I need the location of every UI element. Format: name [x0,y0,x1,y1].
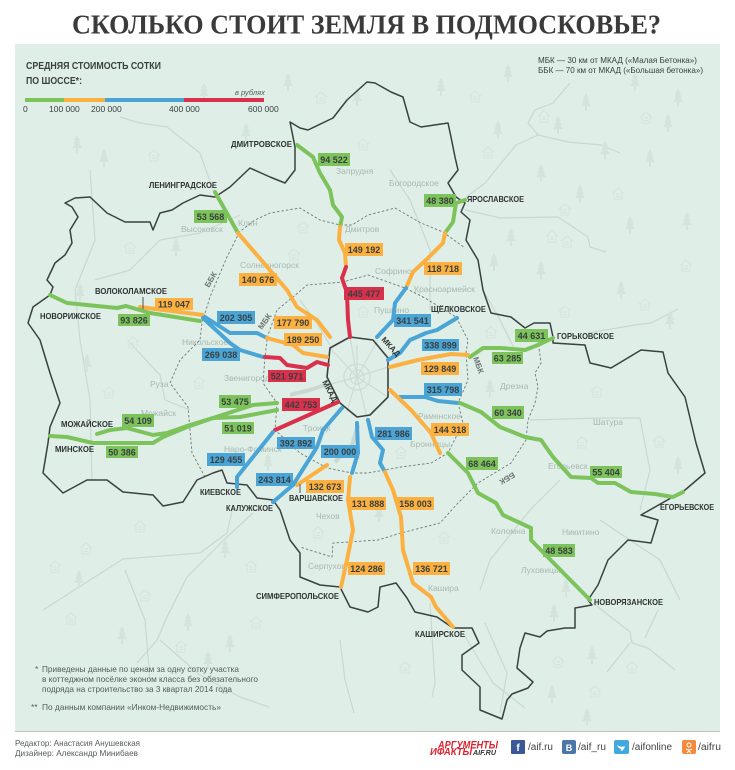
legend: 600 000 [248,104,279,114]
legend: ПО ШОССЕ*: [26,76,82,87]
price 445 477: 445 477 [348,289,380,299]
price 48 380 [424,194,456,207]
highway: Novorizhskoe inner [203,318,328,368]
road ring labels: МБК [471,356,486,375]
price 50 386: 50 386 [108,448,136,458]
highway names: ВАРШАВСКОЕ [289,493,343,503]
AIF logo: AIF.RU [472,748,497,757]
town names [141,166,623,593]
price 132 673 [306,480,344,493]
highway names: КАЛУЖСКОЕ [226,503,273,513]
price 54 109 [122,414,154,427]
price 53 475: 53 475 [221,397,249,407]
highway names [40,139,714,639]
price 94 522: 94 522 [320,155,348,165]
highway names: НОВОРИЖСКОЕ [40,311,101,321]
town names: Пушкино [374,305,409,315]
price 48 380: 48 380 [426,196,454,206]
ring road note: ББК — 70 км от МКАД («Большая бетонка») [538,65,703,75]
price 269 038: 269 038 [205,350,237,360]
footnotes: * [35,664,39,674]
vkontakte: В [566,743,573,753]
price 129 849 [421,362,459,375]
highway: Yaroslavskoe [377,200,465,337]
road ring labels: МБК [256,312,274,331]
highway: Novorizhskoe [50,295,203,321]
road ring labels: ББК [498,470,516,486]
town names: Троицк [303,423,331,433]
highway: Kaluzhskoe [273,408,342,502]
price 149 192: 149 192 [348,245,380,255]
highway names: ЩЁЛКОВСКОЕ [431,304,486,314]
price 200 000 [321,445,359,458]
highway names: ЛЕНИНГРАДСКОЕ [149,180,217,190]
price 269 038 [202,348,240,361]
title: СКОЛЬКО СТОИТ ЗЕМЛЯ В ПОДМОСКОВЬЕ? [72,10,661,40]
background road network [43,83,680,713]
price 177 790: 177 790 [277,318,309,328]
MBK ring dashed [263,275,468,473]
highway: Gorkovskoe [390,338,553,367]
highway: Kashirskoe [368,420,453,627]
footnotes: Приведены данные по ценам за одну сотку участка [42,664,239,674]
town names: Кашира [428,583,459,593]
price 149 192 [345,243,383,256]
price 119 047: 119 047 [158,300,190,310]
legend: 0 [23,104,28,114]
highway names: МОЖАЙСКОЕ [61,418,113,429]
town names: Наро-Фоминск [224,444,282,454]
town names: Высоковск [181,224,223,234]
highway names: СИМФЕРОПОЛЬСКОЕ [256,591,339,601]
road ring labels: МКАД [320,379,339,404]
price 48 583 [543,544,575,557]
highway: Dmitrovskoe [297,145,350,337]
price 48 583: 48 583 [545,546,573,556]
highway: Kievskoe [237,402,338,487]
facebook: /aif.ru [528,742,553,753]
town names: Чехов [316,511,340,521]
facebook [511,740,553,754]
price 140 676: 140 676 [242,275,274,285]
price 68 464: 68 464 [468,459,496,469]
tree icons [72,64,692,726]
price 243 814 [256,473,293,486]
town names: Коломна [491,526,526,536]
price 136 721: 136 721 [415,564,448,574]
house icons [49,91,692,697]
price 51 019: 51 019 [224,424,252,434]
twitter: /aifonline [632,742,672,753]
odnoklassniki: /aifru [698,742,721,753]
credits: Дизайнер: Александр Минибаев [15,748,138,758]
price 53 568 [194,210,227,223]
price 442 753: 442 753 [285,400,317,410]
town names: Дмитров [345,224,380,234]
price 341 541: 341 541 [396,316,429,326]
MKAD ring [327,337,388,417]
highway: Novoryazanskoe [390,390,590,600]
footnotes: подряда на строительство за 3 квартал 2014 года [42,684,232,694]
Moscow city street network [327,337,388,417]
price 68 464 [466,457,498,470]
town names: Софрино [375,266,412,276]
price 341 541 [394,314,431,327]
price 93 826: 93 826 [120,316,148,326]
ring road note: МБК — 30 км от МКАД («Малая Бетонка») [538,55,697,65]
price 94 522 [318,153,350,166]
highway names: ЕГОРЬЕВСКОЕ [660,502,714,512]
price 392 892: 392 892 [280,438,312,448]
legend: 200 000 [91,104,122,114]
highway names: ЯРОСЛАВСКОЕ [467,194,524,204]
footer rule [15,731,720,732]
town names: Солнечногорск [240,260,299,270]
AIF logo: АРГУМЕНТЫ [437,740,499,752]
price 54 109: 54 109 [124,416,152,426]
price 53 475 [219,395,251,408]
price 200 000: 200 000 [324,447,356,457]
price 140 676 [239,273,277,286]
price 144 318: 144 318 [434,425,466,435]
highway: Leningradskoe [215,192,330,337]
highway names: МИНСКОЕ [55,444,94,454]
highway: Volokolamskoe [205,317,327,357]
price 158 003: 158 003 [399,499,432,509]
price 124 286: 124 286 [350,564,383,574]
odnoklassniki [682,740,721,754]
price 131 888: 131 888 [352,499,384,509]
price 202 305 [217,311,255,324]
town names: Богородское [389,178,439,188]
town names: Звенигород [224,373,270,383]
highway names: КАШИРСКОЕ [415,629,465,639]
price 44 631 [515,329,548,342]
town names: Серпухов [308,561,346,571]
price 202 305: 202 305 [220,313,252,323]
footnotes: в коттеджном посёлке эконом класса без обязательного [42,674,258,684]
price 60 340: 60 340 [494,408,522,418]
price 281 986 [375,427,412,440]
price 60 340 [492,406,524,419]
legend: 400 000 [169,104,200,114]
town names: Дрезна [500,381,529,391]
price 338 899: 338 899 [424,340,457,350]
price 118 718: 118 718 [427,264,459,274]
AIF logo: ИФАКТЫ [430,747,473,758]
highway: Mozhaiskoe [97,403,277,435]
price 44 631: 44 631 [518,331,545,341]
footnotes: По данным компании «Инком-Недвижимость» [42,702,221,712]
legend: 100 000 [49,104,80,114]
price 521 971: 521 971 [271,372,303,382]
town names: Красноармейск [414,284,475,294]
footnotes: ** [31,702,38,712]
price 129 455: 129 455 [210,455,242,465]
legend: в рублях [235,88,265,97]
AIF logo [430,740,499,758]
highway: Simferopolskoe [341,423,358,587]
price 442 753 [282,398,320,411]
credits: Редактор: Анастасия Анушевская [15,738,140,748]
highway: Shchelkovskoe [388,318,457,360]
town names: Никитино [562,527,600,537]
highway: Varshavskoe [297,465,327,485]
price 189 250 [284,333,322,346]
price 53 568: 53 568 [197,212,224,222]
footnotes [31,664,258,712]
town names: Руза [150,379,169,389]
price 315 798 [424,383,462,396]
town names: Никольское [182,337,228,347]
price 63 285: 63 285 [494,354,521,364]
price 281 986: 281 986 [377,429,410,439]
vkontakte [562,740,606,754]
price 55 404: 55 404 [592,468,620,478]
town names: Запрудня [336,166,374,176]
highway names: ВОЛОКОЛАМСКОЕ [95,286,167,296]
town names: Клин [238,218,258,228]
price 158 003 [397,497,434,510]
price labels [106,153,622,575]
price 129 849: 129 849 [424,364,456,374]
highway names: КИЕВСКОЕ [200,487,241,497]
vkontakte: /aif_ru [578,742,606,753]
price 131 888 [350,497,386,510]
facebook: f [516,743,520,754]
price 118 718 [424,262,462,275]
town names: Луховицы [521,565,560,575]
town names: Можайск [141,408,176,418]
road ring labels [203,270,517,486]
town names: Раменское [418,411,461,421]
highway: Egoryevskoe [400,397,683,497]
highway names: ДМИТРОВСКОЕ [231,139,292,149]
legend [23,61,279,114]
ring road note [538,55,703,75]
price 177 790 [274,316,312,329]
social links [511,740,721,754]
town names: Бронницы [410,439,450,449]
price 144 318 [431,423,469,436]
price 189 250: 189 250 [287,335,319,345]
price 445 477 [344,287,384,300]
highway names: ГОРЬКОВСКОЕ [557,331,614,341]
price 124 286 [348,562,385,575]
town names: Егорьевск [548,461,588,471]
price 315 798: 315 798 [427,385,459,395]
town names: Шатура [593,417,623,427]
highway: Minskoe [50,410,277,443]
price 243 814: 243 814 [258,475,291,485]
price tick marks [143,297,300,493]
highway names: НОВОРЯЗАНСКОЕ [594,597,663,607]
legend: СРЕДНЯЯ СТОИМОСТЬ СОТКИ [26,61,161,72]
BBK ring dashed [170,208,541,557]
Moscow region border [28,82,705,719]
credits [15,738,140,758]
road ring labels: МКАД [380,335,402,359]
price 129 455 [207,453,245,466]
twitter [614,740,672,754]
road ring labels: ББК [203,270,219,289]
price 136 721 [413,562,450,575]
price 132 673: 132 673 [309,482,341,492]
